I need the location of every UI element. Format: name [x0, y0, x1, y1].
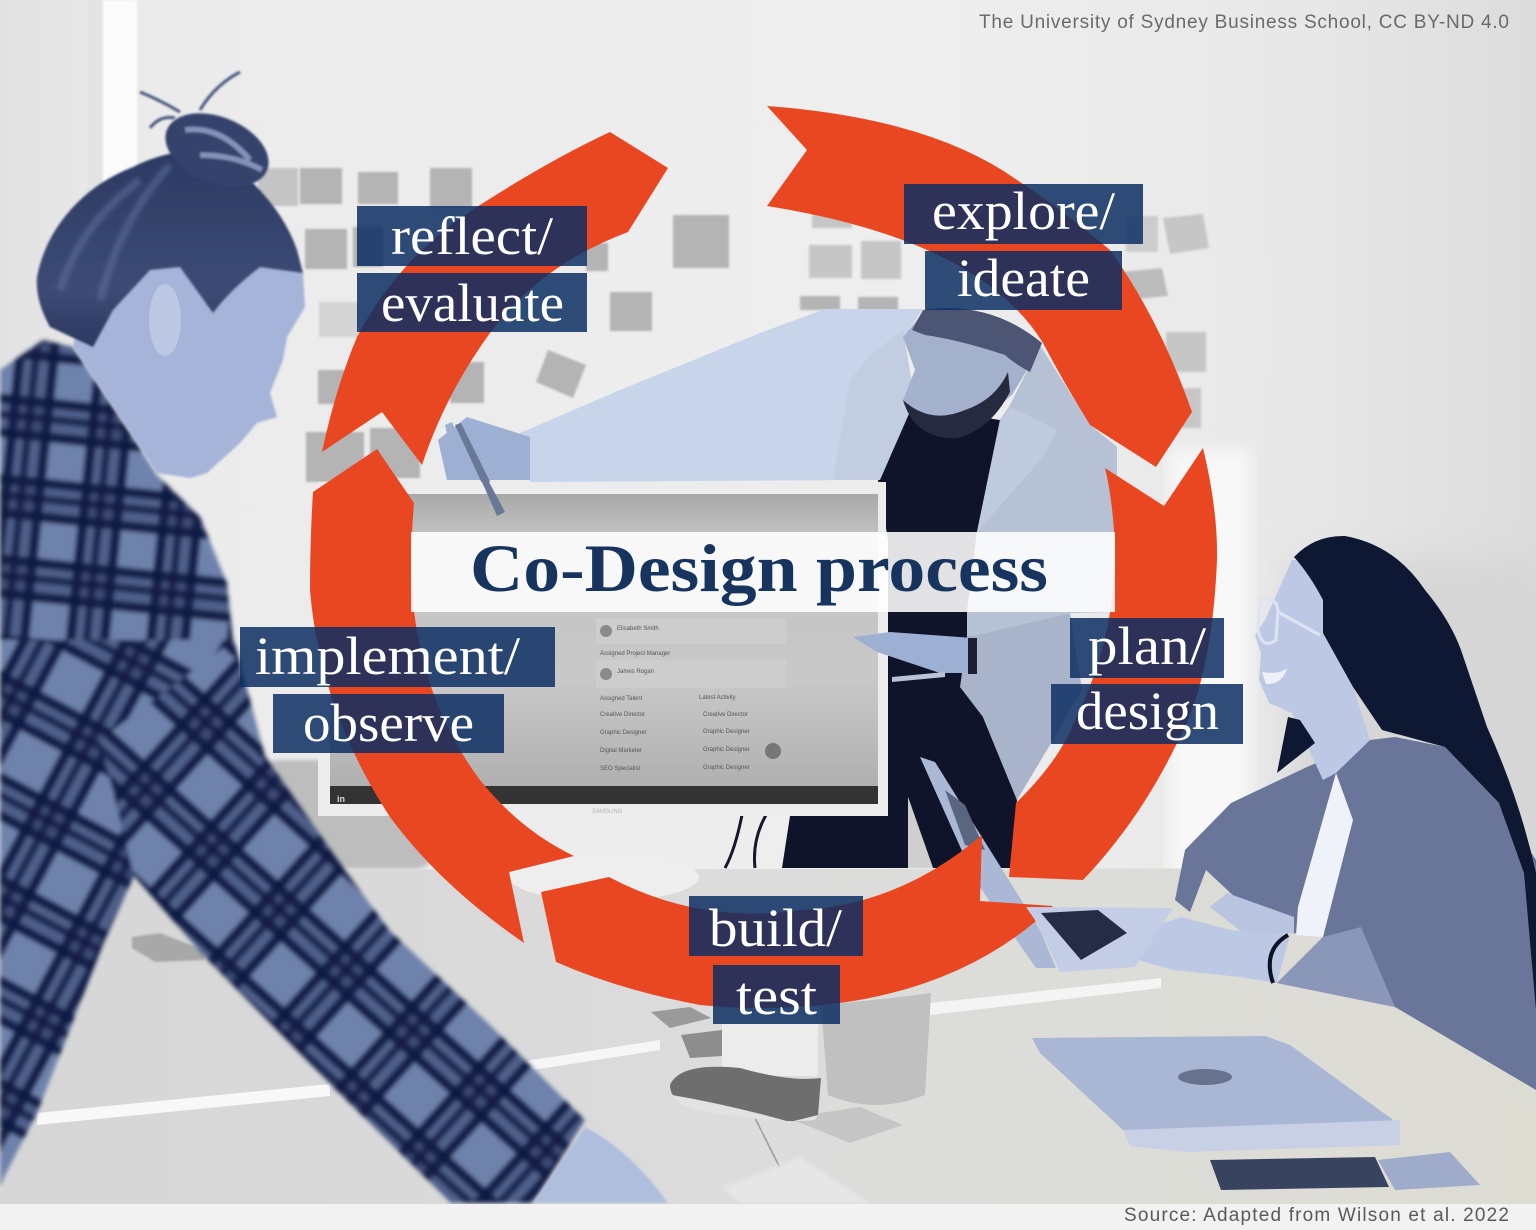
label: plan / design: design [1076, 681, 1219, 741]
label: build / test: test [736, 966, 817, 1026]
long hair [1294, 536, 1536, 1010]
denim jacket [1175, 737, 1536, 1090]
monitor: Assigned Talent [600, 696, 643, 702]
ear [149, 284, 181, 356]
title text: Co-Design process [470, 530, 1048, 606]
hands and forearms [1210, 893, 1294, 937]
cycle arrow: reflect / evaluate [322, 132, 668, 465]
hair bun [155, 99, 279, 201]
label: reflect / evaluate: reflect/ [391, 206, 553, 266]
label: explore / ideate: explore/ [932, 181, 1115, 241]
monitor: SEO Specialist [600, 766, 640, 772]
monitor: SAMSUNG [592, 809, 623, 815]
label: explore / ideate: ideate [957, 248, 1090, 308]
right woman at laptop [1114, 536, 1536, 1090]
source strip: Source: Adapted from Wilson et al. 2022 [1124, 1205, 1509, 1226]
glasses [1258, 599, 1320, 643]
laptop lid [920, 757, 1056, 968]
monitor: Latest Activity [699, 695, 736, 701]
cycle arrow: implement / observe [310, 449, 574, 943]
hand [533, 1127, 668, 1203]
hair [37, 153, 303, 347]
label: implement / observe: observe [303, 693, 474, 753]
label: reflect / evaluate: evaluate [381, 273, 564, 333]
monitor: Creative Director [703, 712, 748, 718]
title band [411, 530, 1115, 612]
label: build / test [689, 896, 863, 1026]
source strip [0, 1204, 1536, 1230]
monitor: Graphic Designer [703, 765, 750, 771]
label: explore / ideate [904, 181, 1143, 310]
monitor: Assigned Project Manager [600, 651, 670, 657]
label: plan / design [1051, 616, 1243, 744]
man presenting [438, 308, 1117, 868]
monitor: Elisabeth Smith [617, 626, 659, 632]
face and neck [73, 240, 305, 478]
shirt [0, 340, 585, 1203]
face [1255, 560, 1370, 780]
monitor: Graphic Designer [703, 729, 750, 735]
monitor: Graphic Designer [600, 730, 647, 736]
monitor [318, 482, 886, 901]
monitor: Graphic Designer [703, 747, 750, 753]
label: implement / observe: implement/ [255, 626, 520, 686]
left woman in plaid shirt [0, 72, 668, 1203]
label: implement / observe [240, 626, 555, 753]
monitor: in [337, 794, 345, 804]
monitor: James Rogan [617, 669, 654, 675]
label: reflect / evaluate [357, 206, 587, 333]
white top [1296, 773, 1353, 937]
monitor: Creative Director [600, 712, 645, 718]
sticky notes on the wall [258, 168, 1209, 482]
label: build / test: build/ [709, 898, 842, 958]
cycle arrow: build / test [541, 835, 1053, 1008]
label: plan / design: plan/ [1088, 616, 1206, 676]
monitor: Digital Marketer [600, 748, 642, 754]
open laptop base and keyboard [1026, 907, 1173, 972]
table items: cups, eraser, closed laptop, phone [651, 993, 1480, 1190]
cycle arrow: explore / ideate [767, 106, 1192, 467]
cycle arrow: plan / design [1009, 448, 1217, 880]
presenter's open hand and pen over monitor [445, 422, 977, 682]
credit line: The University of Sydney Business School, CC BY-ND 4.0 [979, 12, 1509, 33]
